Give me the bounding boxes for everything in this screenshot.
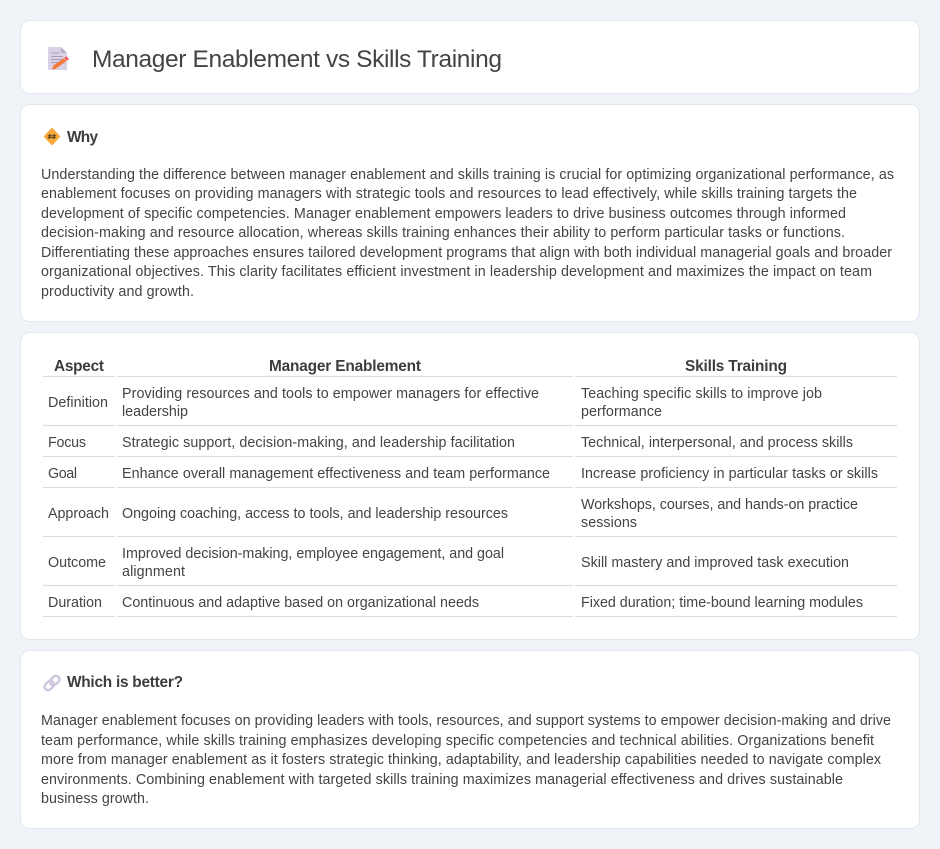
text block: why paragraph: decision-making and resource allocation, whereas skills training enhances their ability to perform particular tasks or functions. — [41, 225, 845, 241]
text block: why paragraph: Differentiating these approaches ensures tailored development programs that align with both individual managerial goals and broader — [41, 245, 892, 261]
header panel — [20, 20, 920, 94]
row: definition — [48, 386, 822, 420]
row: goal — [48, 466, 878, 482]
row: focus — [48, 435, 853, 451]
table header row: Manager Enablement — [269, 358, 421, 375]
row: approach: sessions — [581, 515, 637, 531]
text block: why paragraph: development of specific competencies. Manager enablement empowers leaders to drive business outcomes through informed — [41, 206, 846, 222]
row: duration: Fixed duration; time-bound learning modules — [581, 595, 863, 611]
text block: why paragraph: productivity and growth. — [41, 284, 194, 300]
text block: which is better paragraph: team performance, while skills training emphasizes developing specific competencies and technical abilities. Organizations benefit — [41, 733, 874, 749]
icon: orange diamond sign — [44, 128, 60, 144]
row: outcome: alignment — [122, 564, 185, 580]
row: approach: Approach — [48, 506, 109, 522]
row: approach — [48, 497, 858, 531]
row: definition: Providing resources and tools to empower managers for effective — [122, 386, 539, 402]
row: outcome: Outcome — [48, 555, 106, 571]
text block: why paragraph: enablement focuses on providing managers with strategic tools and resources to lead effectively, while skills training targets the — [41, 186, 857, 202]
row: focus: Focus — [48, 435, 86, 451]
text block: why paragraph — [41, 167, 894, 300]
table header row: Aspect — [54, 358, 104, 375]
heading: why: Why — [67, 129, 98, 146]
row: duration — [48, 595, 863, 611]
text block: which is better paragraph: more from manager enablement as it fosters strategic thinking, adaptability, and leadership capabilities needed to navigate complex — [41, 752, 881, 768]
row: goal: Increase proficiency in particular tasks or skills — [581, 466, 878, 482]
icon: chain link — [43, 674, 61, 692]
text block: why paragraph: organizational objectives. This clarity facilitates efficient investment in leadership development and maximizes the impact on team — [41, 264, 872, 280]
row: definition: performance — [581, 404, 662, 420]
panel: comparison table — [20, 332, 920, 640]
text block: which is better paragraph: Manager enablement focuses on providing leaders with tools, resources, and support systems to empower decision-making and drive — [41, 713, 891, 729]
text block: why paragraph: Understanding the difference between manager enablement and skills training is crucial for optimizing organizational performance, as — [41, 167, 894, 183]
row: approach: Workshops, courses, and hands-on practice — [581, 497, 858, 513]
row: outcome — [48, 546, 849, 580]
row: focus: Technical, interpersonal, and process skills — [581, 435, 853, 451]
panel: why — [20, 104, 920, 322]
row: outcome: Improved decision-making, employee engagement, and goal — [122, 546, 504, 562]
title: Manager Enablement vs Skills Training — [92, 46, 502, 73]
text block: which is better paragraph: business growth. — [41, 791, 149, 807]
row: definition: leadership — [122, 404, 188, 420]
row: definition: Definition — [48, 395, 108, 411]
panel: which is better — [20, 650, 920, 828]
row: focus: Strategic support, decision-making, and leadership facilitation — [122, 435, 515, 451]
row: goal: Enhance overall management effectiveness and team performance — [122, 466, 550, 482]
row: approach: Ongoing coaching, access to tools, and leadership resources — [122, 506, 508, 522]
row: definition: Teaching specific skills to improve job — [581, 386, 822, 402]
icon: memo with pencil — [48, 47, 69, 70]
table header row: Skills Training — [685, 358, 787, 375]
text block: which is better paragraph — [41, 713, 891, 807]
heading: which is better: Which is better? — [67, 674, 183, 691]
row: outcome: Skill mastery and improved task execution — [581, 555, 849, 571]
row: goal: Goal — [48, 466, 77, 482]
row: duration: Duration — [48, 595, 102, 611]
table header row — [54, 358, 787, 375]
row: duration: Continuous and adaptive based on organizational needs — [122, 595, 479, 611]
text block: which is better paragraph: environments. Combining enablement with targeted skills training maximizes managerial effectiveness and drives sustainable — [41, 772, 843, 788]
